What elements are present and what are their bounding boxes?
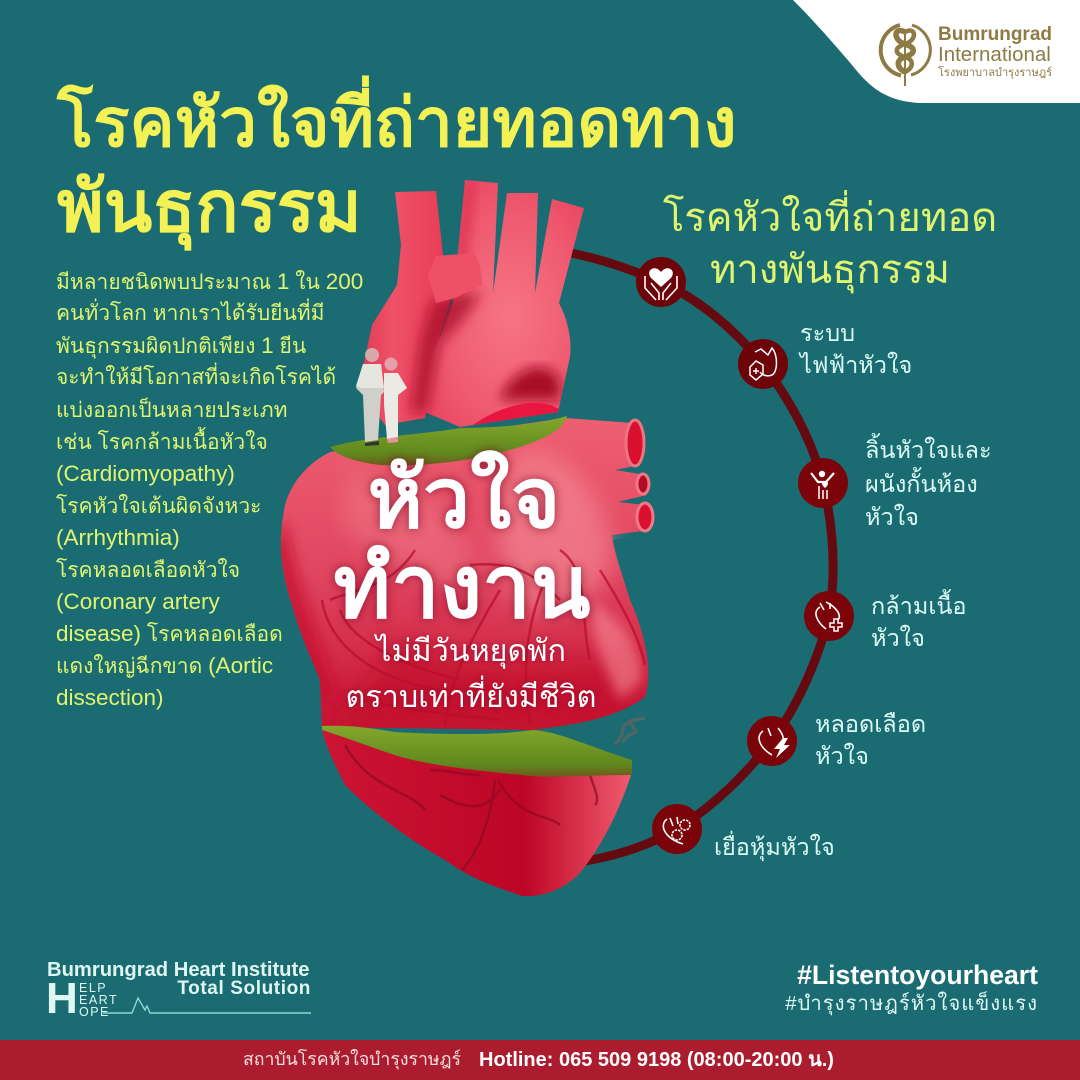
label: heart muscle: กล้ามเนื้อ	[871, 593, 967, 619]
shadow under pulmonary branch	[410, 292, 482, 415]
footer bar: Hotline: 065 509 9198 (08:00-20:00 น.)	[479, 1049, 834, 1071]
icon: person with heart	[798, 458, 848, 508]
body paragraph: (Arrhythmia)	[56, 525, 180, 550]
body paragraph: แดงใหญ่ฉีกขาด (Aortic	[56, 653, 273, 678]
heart illustration	[280, 180, 654, 896]
label: heart muscle: หัวใจ	[871, 625, 925, 651]
body paragraph: (Cardiomyopathy)	[56, 461, 235, 486]
figure: jumping man	[615, 718, 645, 745]
hashtag	[785, 960, 1038, 1016]
label: valves and septum	[865, 433, 992, 530]
logo panel	[793, 0, 1080, 103]
heart subheading: ไม่มีวันหยุดพัก	[376, 634, 566, 668]
label: pericardium: เยื่อหุ้มหัวใจ	[714, 834, 835, 860]
institute logo: Bumrungrad Heart Institute	[47, 959, 309, 981]
icon: heart with shield	[738, 339, 788, 389]
label: coronary arteries	[815, 711, 926, 769]
label: coronary arteries: หลอดเลือด	[815, 711, 926, 737]
footer bar: สถาบันโรคหัวใจบำรุงราษฎร์	[243, 1049, 461, 1069]
hashtag: #Listentoyourheart	[797, 960, 1038, 990]
institute logo: Total Solution	[177, 978, 311, 999]
logo text: International	[938, 43, 1051, 66]
institute logo: H	[46, 974, 78, 1023]
heart headline	[330, 444, 596, 636]
heart subheading	[346, 632, 596, 714]
body paragraph: แบ่งออกเป็นหลายประเภท	[56, 399, 287, 422]
institute logo: ELP EART OPE	[79, 981, 118, 1019]
icon: heart with plus	[804, 591, 854, 641]
body paragraph	[56, 269, 363, 710]
logo text: Bumrungrad	[938, 24, 1052, 45]
icon: heart with lightning	[747, 716, 797, 766]
icon: caring hands	[636, 257, 686, 307]
label: electrical system: ไฟฟ้าหัวใจ	[800, 352, 912, 378]
veins	[322, 550, 645, 725]
title: พันธุกรรม	[57, 168, 362, 247]
title	[56, 75, 737, 251]
heart subheading: ตราบเท่าที่ยังมีชีวิต	[346, 680, 596, 714]
body paragraph: มีหลายชนิดพบประมาณ 1 ใน 200	[56, 269, 363, 294]
logo text: โรงพยาบาลบำรุงราษฎร์	[938, 67, 1052, 79]
aorta and arteries	[410, 180, 584, 430]
heart headline: หัวใจ	[368, 451, 560, 545]
body paragraph: disease) โรคหลอดเลือด	[56, 621, 283, 646]
label: valves and septum: หัวใจ	[865, 504, 919, 530]
body paragraph: พันธุกรรมผิดปกติเพียง 1 ยีน	[56, 333, 306, 358]
upper heart muscle	[270, 418, 653, 730]
label: valves and septum: ลิ้นหัวใจและ	[865, 437, 992, 463]
right heading: ทางพันธุกรรม	[710, 248, 950, 292]
pulmonary trunk	[362, 191, 450, 425]
right heading	[663, 190, 997, 294]
right heading: โรคหัวใจที่ถ่ายทอด	[663, 196, 997, 240]
body paragraph: โรคหลอดเลือดหัวใจ	[56, 559, 240, 582]
footer bar	[0, 1040, 1080, 1080]
body paragraph: dissection)	[56, 685, 164, 710]
body paragraph: คนทั่วโลก หากเราได้รับยีนที่มี	[56, 302, 324, 325]
figures: elderly couple	[356, 348, 407, 446]
lower grass layer	[322, 726, 632, 777]
label: coronary arteries: หัวใจ	[815, 743, 869, 769]
vessel openings	[626, 420, 644, 466]
hashtag: #บำรุงราษฎร์หัวใจแข็งแรง	[785, 993, 1038, 1015]
body paragraph: (Coronary artery	[56, 589, 220, 614]
body paragraph: โรคหัวใจเต้นผิดจังหวะ	[56, 495, 261, 518]
lower heart	[322, 730, 632, 896]
body paragraph: เช่น โรคกล้ามเนื้อหัวใจ	[56, 431, 268, 454]
logo text	[938, 24, 1052, 79]
logo emblem	[881, 25, 930, 86]
institute logo	[46, 959, 311, 1023]
label: valves and septum: ผนังกั้นห้อง	[865, 471, 978, 497]
body paragraph: จะทำให้มีโอกาสที่จะเกิดโรคได้	[56, 366, 336, 389]
pulmonary branch	[428, 253, 482, 303]
heart headline: ทำงาน	[333, 539, 590, 636]
upper grass layer	[330, 416, 567, 465]
title: โรคหัวใจที่ถ่ายทอดทาง	[57, 86, 737, 161]
label: electrical system	[798, 320, 912, 378]
label: heart muscle	[871, 589, 967, 651]
label: electrical system: ระบบ	[800, 320, 855, 346]
icon: heart with gears	[652, 804, 702, 854]
